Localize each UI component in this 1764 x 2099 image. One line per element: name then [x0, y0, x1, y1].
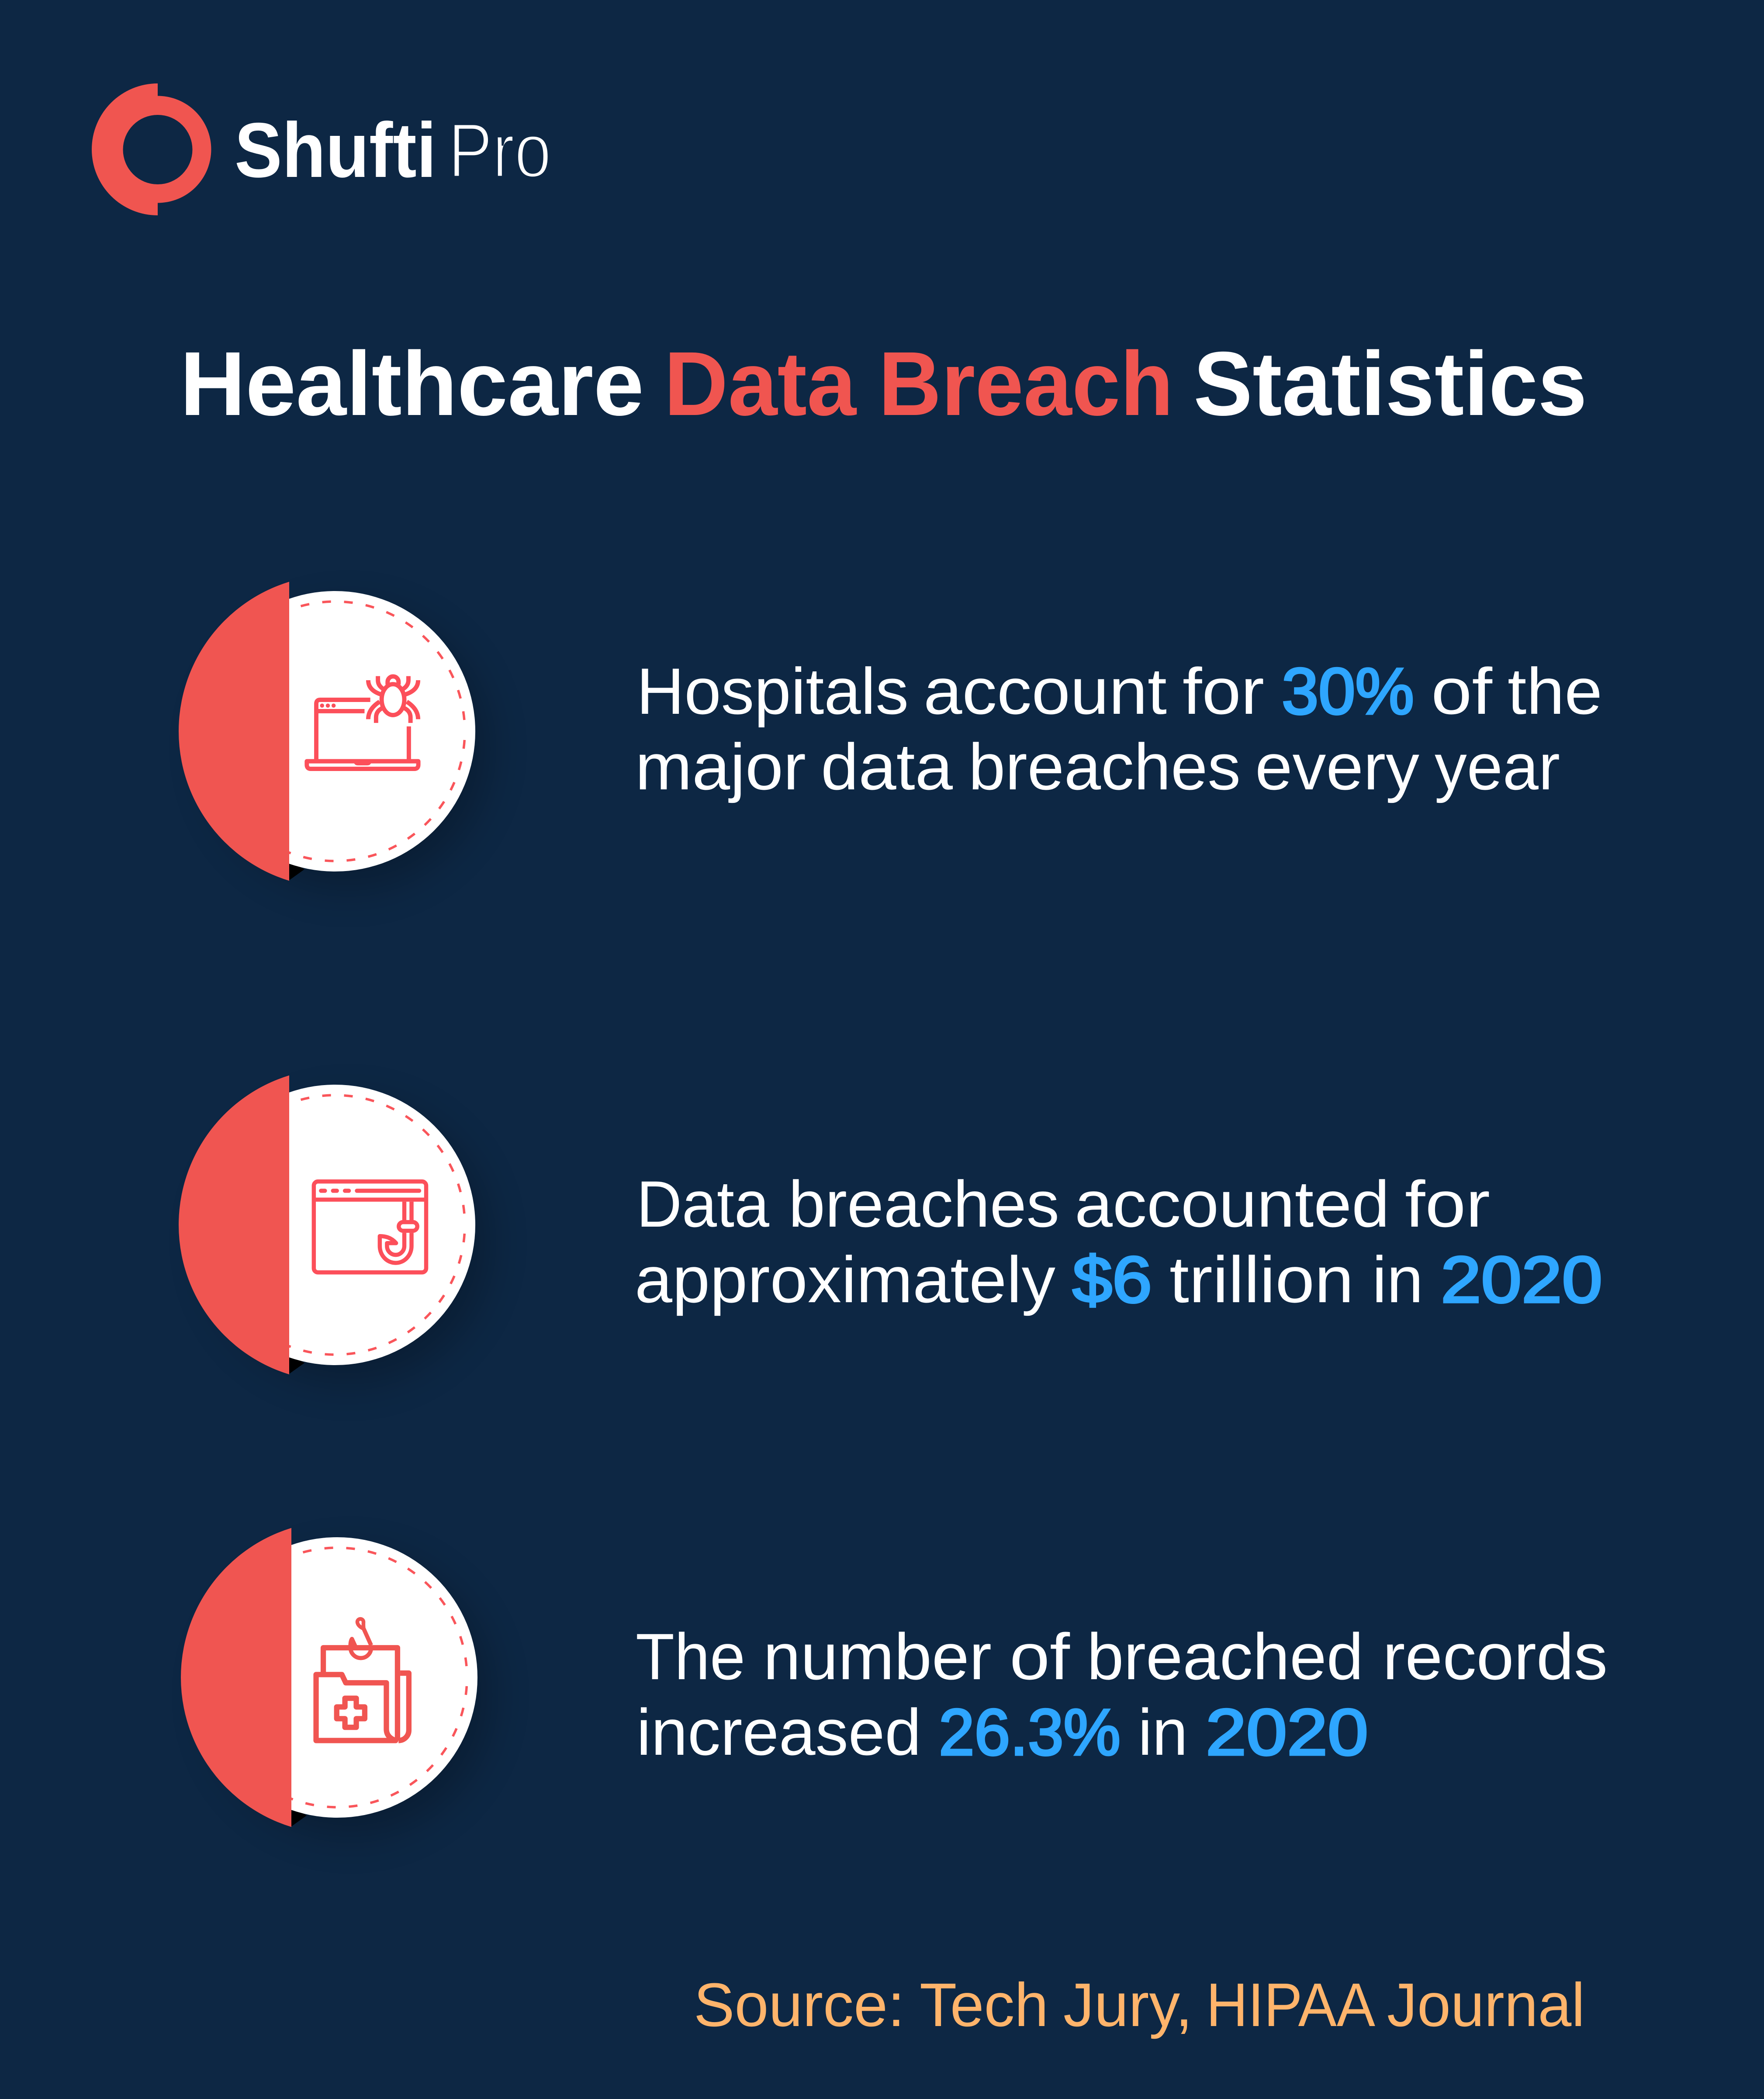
text: hospitals statistic: 30% — [1282, 654, 1414, 728]
panel: hospitals badge — [179, 575, 491, 891]
text: hospitals statistic: for — [1183, 654, 1264, 728]
logo wordmark: Shufti: Shufti — [235, 107, 436, 194]
text: hospitals statistic: data — [821, 730, 953, 803]
title: Statistics — [1193, 333, 1587, 435]
source note — [694, 1970, 1585, 2039]
logo: Shufti Pro — [92, 83, 551, 215]
text: hospitals statistic: year — [1435, 730, 1560, 803]
text: records statistic: number — [763, 1620, 992, 1693]
text: hospitals statistic: account — [924, 654, 1167, 728]
text: hospitals statistic: breaches — [968, 730, 1241, 803]
icon: laptop with bug — [307, 676, 419, 769]
text: records statistic: increased — [636, 1695, 921, 1769]
text: trillion statistic: Data — [636, 1167, 770, 1241]
source note: HIPAA — [1206, 1970, 1375, 2039]
text: records statistic: The — [636, 1620, 745, 1693]
source note: Journal — [1387, 1970, 1585, 2039]
text: trillion statistic — [635, 1167, 1602, 1316]
source note: Tech — [920, 1970, 1048, 2039]
text: hospitals statistic: Hospitals — [636, 654, 909, 728]
text: trillion statistic: accounted — [1075, 1167, 1390, 1241]
text: trillion statistic: for — [1405, 1167, 1490, 1241]
text: hospitals statistic: of — [1431, 654, 1492, 728]
text: records statistic: records — [1383, 1620, 1608, 1693]
text: trillion statistic: breaches — [789, 1167, 1059, 1241]
source note: Jury, — [1063, 1970, 1193, 2039]
title: Healthcare — [180, 333, 644, 435]
logo wordmark: Pro: Pro — [448, 108, 551, 194]
text: records statistic: of — [1010, 1620, 1070, 1693]
text: trillion statistic: in — [1372, 1243, 1423, 1316]
icon: medical folder with hook — [316, 1619, 409, 1740]
icon: browser window with hook — [314, 1182, 426, 1273]
title: Breach — [879, 333, 1173, 435]
text: trillion statistic: $6 — [1072, 1243, 1152, 1316]
text: hospitals statistic: major — [635, 730, 806, 803]
text: hospitals statistic — [635, 654, 1602, 803]
text: hospitals statistic: every — [1255, 730, 1419, 803]
text: records statistic: 2020 — [1206, 1695, 1368, 1769]
text: records statistic: in — [1138, 1695, 1188, 1769]
title: Data — [664, 333, 857, 435]
text: records statistic: breached — [1087, 1620, 1363, 1693]
text: records statistic: 26.3% — [939, 1695, 1121, 1769]
text: hospitals statistic: the — [1508, 654, 1602, 728]
icon: logo ring — [92, 83, 211, 215]
text: trillion statistic: trillion — [1169, 1243, 1354, 1316]
panel: records badge — [181, 1521, 494, 1837]
text: trillion statistic: 2020 — [1441, 1243, 1602, 1316]
source note: Source: — [694, 1970, 905, 2039]
text: trillion statistic: approximately — [635, 1243, 1055, 1316]
panel: trillion badge — [179, 1069, 491, 1384]
title — [180, 333, 1587, 435]
text: records statistic — [636, 1620, 1608, 1769]
